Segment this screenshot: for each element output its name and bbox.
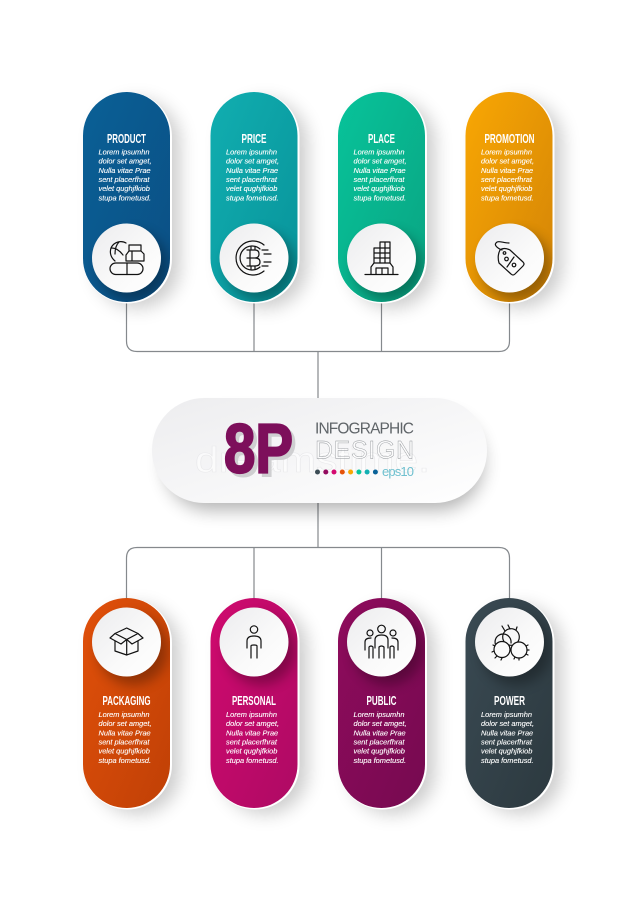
text: packaging body: Nulla vitae Prae: [98, 728, 151, 737]
panel: power: [466, 598, 562, 814]
text: personal body: stupa fometusd.: [226, 756, 279, 765]
panel: price: [210, 92, 308, 308]
text: packaging body: velet qughjfkiob: [98, 747, 150, 756]
panel: product: [83, 92, 180, 308]
heading: 8P: 8P: [224, 410, 293, 488]
heading: power: POWER: [494, 693, 525, 708]
text: place body: velet qughjfkiob: [354, 184, 405, 193]
text: public body: sent placerfhrat: [354, 737, 405, 746]
text: eps10: eps10: [382, 464, 414, 479]
heading: place: PLACE: [368, 131, 395, 146]
text: personal body: sent placerfhrat: [226, 737, 278, 746]
watermark: dreamstime.: [195, 439, 430, 480]
text: power body: Nulla vitae Prae: [481, 728, 533, 737]
text: place body: stupa fometusd.: [354, 193, 406, 202]
text: packaging body: stupa fometusd.: [98, 756, 151, 765]
text: place body: dolor set amget,: [354, 157, 406, 166]
text: personal body: Nulla vitae Prae: [226, 728, 278, 737]
text: public body: Nulla vitae Prae: [354, 728, 406, 737]
text: price body: sent placerfhrat: [226, 175, 278, 184]
text: promotion body: Lorem ipsumhn: [481, 148, 532, 156]
text: place body: Lorem ipsumhn: [354, 148, 404, 156]
text: product body: velet qughjfkiob: [98, 184, 150, 193]
panel: promotion: [466, 92, 562, 308]
icon: box circle: [92, 608, 161, 676]
heading: product: PRODUCT: [107, 131, 146, 146]
panel: packaging: [83, 598, 180, 814]
text: product body: sent placerfhrat: [98, 175, 150, 184]
text: power body: Lorem ipsumhn: [481, 710, 532, 719]
panel: personal: [210, 598, 308, 814]
text: personal body: Lorem ipsumhn: [226, 710, 277, 719]
text: price body: Lorem ipsumhn: [226, 148, 277, 156]
text: packaging body: Lorem ipsumhn: [98, 710, 149, 719]
text: promotion body: velet qughjfkiob: [481, 184, 532, 193]
text: price body: stupa fometusd.: [226, 193, 279, 202]
text: price body: dolor set amget,: [226, 157, 279, 166]
heading: personal: PERSONAL: [232, 693, 276, 708]
icon: group circle: [347, 608, 416, 676]
text: packaging body: sent placerfhrat: [98, 737, 150, 746]
text: public body: dolor set amget,: [354, 719, 406, 728]
text: design: DESIGN: [315, 436, 414, 464]
colour dots: [315, 470, 378, 474]
heading: public: PUBLIC: [366, 693, 397, 708]
text: infographic: INFOGRAPHIC: [315, 420, 414, 438]
icon: price tag circle: [475, 224, 544, 292]
text: promotion body: Nulla vitae Prae: [481, 166, 533, 175]
text: product body: dolor set amget,: [98, 157, 152, 166]
text: power body: sent placerfhrat: [481, 737, 533, 746]
text: personal body: velet qughjfkiob: [226, 747, 277, 756]
text: promotion body: sent placerfhrat: [481, 175, 533, 184]
heading: price: PRICE: [242, 131, 267, 146]
text: product body: Nulla vitae Prae: [98, 166, 151, 175]
text: price body: velet qughjfkiob: [226, 184, 277, 193]
heading: 8P: 8P: [228, 413, 296, 491]
icon: person circle: [220, 608, 288, 676]
text: place body: sent placerfhrat: [354, 175, 405, 184]
text: price body: Nulla vitae Prae: [226, 166, 278, 175]
icon: product circle: [92, 224, 161, 292]
text: promotion body: stupa fometusd.: [481, 193, 534, 202]
icon: building circle: [347, 224, 416, 292]
panel: center title: [152, 398, 487, 510]
text: public body: Lorem ipsumhn: [354, 710, 404, 719]
text: promotion body: dolor set amget,: [481, 157, 534, 166]
heading: packaging: PACKAGING: [102, 693, 150, 708]
icon: bitcoin circle: [220, 224, 288, 292]
text: power body: stupa fometusd.: [481, 756, 534, 765]
icon: joined hands circle: [475, 608, 544, 676]
text: power body: velet qughjfkiob: [481, 747, 532, 756]
connector lines: [126, 303, 510, 598]
panel: public: [338, 598, 435, 814]
text: product body: Lorem ipsumhn: [98, 148, 149, 156]
panel: place: [338, 92, 435, 308]
text: public body: velet qughjfkiob: [354, 747, 405, 756]
text: place body: Nulla vitae Prae: [354, 166, 406, 175]
heading: promotion: PROMOTION: [484, 131, 534, 146]
text: personal body: dolor set amget,: [226, 719, 279, 728]
text: product body: stupa fometusd.: [98, 193, 151, 202]
text: public body: stupa fometusd.: [354, 756, 406, 765]
text: power body: dolor set amget,: [481, 719, 534, 728]
text: packaging body: dolor set amget,: [98, 719, 152, 728]
